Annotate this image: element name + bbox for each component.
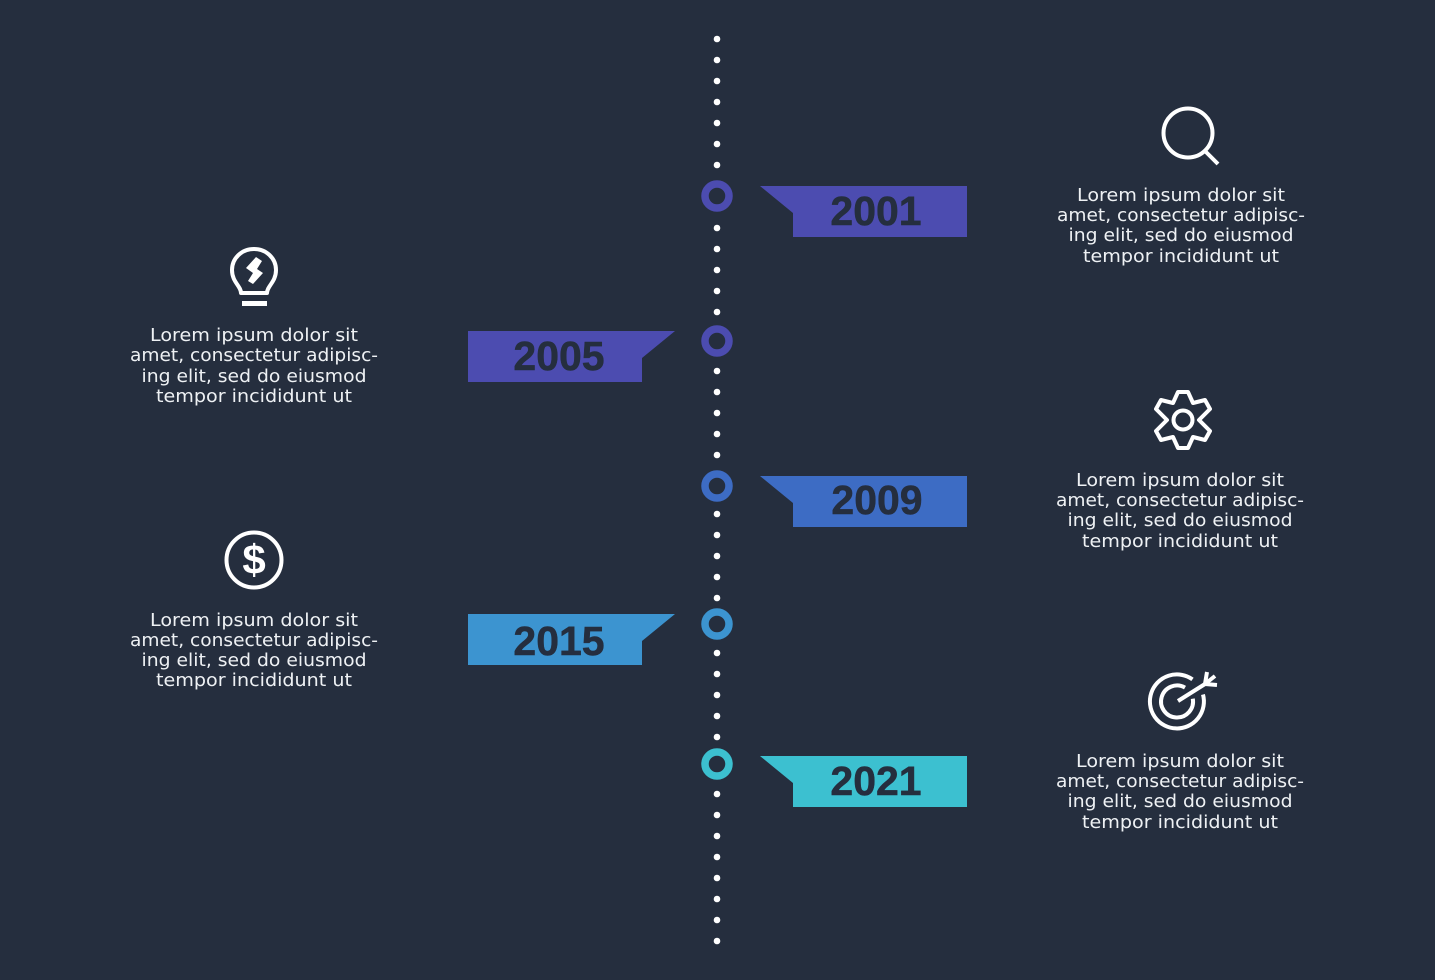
icon: dollar coin bbox=[226, 532, 282, 588]
text block 2001: ing elit, sed do eiusmod bbox=[1068, 225, 1294, 246]
text block 2021: amet, consectetur adipisc- bbox=[1056, 771, 1304, 792]
text block 2009: Lorem ipsum dolor sit bbox=[1076, 470, 1284, 491]
text block 2001 bbox=[1057, 185, 1305, 267]
text block 2009: tempor incididunt ut bbox=[1082, 531, 1278, 552]
year flag 2005 bbox=[468, 331, 675, 382]
year flag 2009 bbox=[760, 476, 967, 527]
text block 2009: ing elit, sed do eiusmod bbox=[1068, 510, 1292, 531]
text block 2005: ing elit, sed do eiusmod bbox=[142, 366, 366, 387]
text block 2021: ing elit, sed do eiusmod bbox=[1068, 791, 1292, 812]
text block 2001: Lorem ipsum dolor sit bbox=[1077, 185, 1285, 206]
year flag 2015: 2015 bbox=[513, 618, 605, 664]
icon: dollar coin: $ bbox=[242, 536, 266, 583]
text block 2015: ing elit, sed do eiusmod bbox=[142, 650, 366, 671]
timeline marker 2009 bbox=[705, 474, 729, 498]
text block 2009 bbox=[1056, 470, 1304, 552]
text block 2005: tempor incididunt ut bbox=[156, 386, 352, 407]
text block 2015: tempor incididunt ut bbox=[156, 670, 352, 691]
year flag 2001 bbox=[760, 186, 967, 237]
text block 2005: Lorem ipsum dolor sit bbox=[150, 325, 358, 346]
year flag 2015 bbox=[468, 614, 675, 665]
year flag 2021: 2021 bbox=[830, 758, 922, 804]
text block 2001: amet, consectetur adipisc- bbox=[1057, 205, 1305, 226]
text block 2015 bbox=[130, 610, 378, 691]
icon: target with arrow bbox=[1150, 672, 1217, 728]
year flag 2009: 2009 bbox=[831, 477, 923, 523]
text block 2001: tempor incididunt ut bbox=[1083, 246, 1279, 267]
icon: gear bbox=[1156, 392, 1210, 448]
icon: light bulb with bolt bbox=[232, 249, 276, 306]
year flag 2001: 2001 bbox=[830, 188, 922, 234]
text block 2015: Lorem ipsum dolor sit bbox=[150, 610, 358, 631]
text block 2021 bbox=[1056, 751, 1304, 833]
year flag 2021 bbox=[760, 756, 967, 807]
dotted timeline axis bbox=[714, 36, 720, 944]
text block 2021: Lorem ipsum dolor sit bbox=[1076, 751, 1284, 772]
text block 2015: amet, consectetur adipisc- bbox=[130, 630, 378, 651]
timeline marker 2015 bbox=[705, 612, 729, 636]
timeline marker 2005 bbox=[705, 329, 729, 353]
year flag 2005: 2005 bbox=[513, 333, 605, 379]
text block 2021: tempor incididunt ut bbox=[1082, 812, 1278, 833]
text block 2005: amet, consectetur adipisc- bbox=[130, 345, 378, 366]
icon: magnifying glass bbox=[1164, 108, 1218, 164]
text block 2009: amet, consectetur adipisc- bbox=[1056, 490, 1304, 511]
timeline marker 2001 bbox=[705, 184, 729, 208]
text block 2005 bbox=[130, 325, 378, 407]
timeline marker 2021 bbox=[705, 752, 729, 776]
